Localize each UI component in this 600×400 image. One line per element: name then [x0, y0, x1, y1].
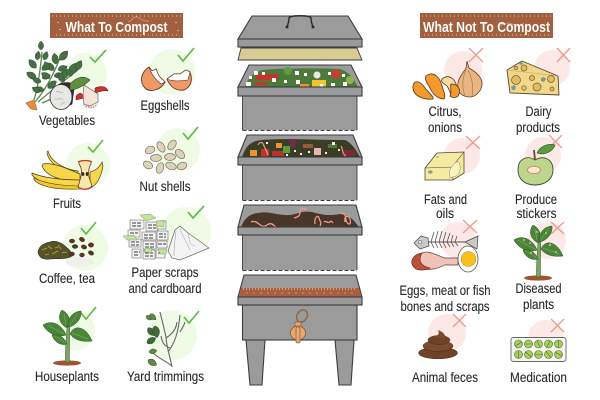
label: Dairy — [526, 104, 552, 119]
label: Vegetables — [39, 113, 95, 128]
label: Diseased — [516, 281, 562, 296]
label: Fruits — [53, 196, 81, 211]
label: Paper scraps — [132, 265, 199, 280]
item: paper scraps and cardboard — [123, 206, 211, 296]
label: Eggs, meat or fish — [400, 283, 490, 298]
bedding sheet — [238, 48, 362, 60]
label: Citrus, — [428, 104, 462, 119]
label line two: bones and scraps — [400, 299, 490, 314]
item: nut shells — [140, 127, 200, 194]
label line two: products — [516, 120, 560, 135]
heading: what to compost: What To Compost — [66, 19, 168, 36]
tray 1: fresh food scraps — [238, 65, 362, 130]
heading: what not to compost — [420, 13, 553, 38]
item: medication — [510, 319, 567, 385]
item: eggshells — [140, 48, 195, 113]
item: fruits — [32, 140, 110, 211]
label: Animal feces — [412, 370, 478, 385]
label: Nut shells — [140, 179, 191, 194]
item: produce stickers — [515, 135, 562, 221]
item: houseplants — [35, 307, 99, 384]
heading: what not to compost: What Not To Compost — [423, 19, 550, 36]
item: dairy products — [507, 48, 570, 135]
label: Medication — [510, 370, 567, 385]
base tray with tap and legs — [238, 275, 362, 385]
panel: what to compost — [25, 13, 211, 384]
item: vegetables — [25, 41, 108, 128]
label: Eggshells — [140, 98, 190, 113]
item: fats and oils — [424, 136, 480, 221]
item: coffee, tea — [38, 222, 108, 286]
worm bin — [238, 16, 362, 385]
item: diseased plants — [514, 221, 566, 312]
label line two: onions — [428, 120, 462, 135]
item: citrus, onions — [413, 48, 483, 135]
label line two: stickers — [516, 206, 557, 221]
label line two: plants — [523, 297, 554, 312]
item: animal feces — [412, 314, 478, 385]
tray 2: decomposing scraps — [238, 135, 362, 200]
panel: what not to compost — [400, 13, 570, 385]
tray 3: worms in castings — [238, 205, 362, 270]
label: Houseplants — [35, 369, 99, 384]
label: Coffee, tea — [39, 271, 95, 286]
item: eggs, meat, fish bones and scraps — [400, 220, 490, 314]
label: Fats and — [424, 192, 467, 207]
label: Produce — [515, 192, 557, 207]
lid — [238, 16, 362, 47]
tap — [290, 308, 310, 343]
label: Yard trimmings — [127, 369, 204, 384]
label line two: oils — [436, 206, 454, 221]
item: yard trimmings — [127, 310, 204, 384]
label line two: and cardboard — [128, 281, 202, 296]
heading: what to compost — [50, 13, 183, 38]
